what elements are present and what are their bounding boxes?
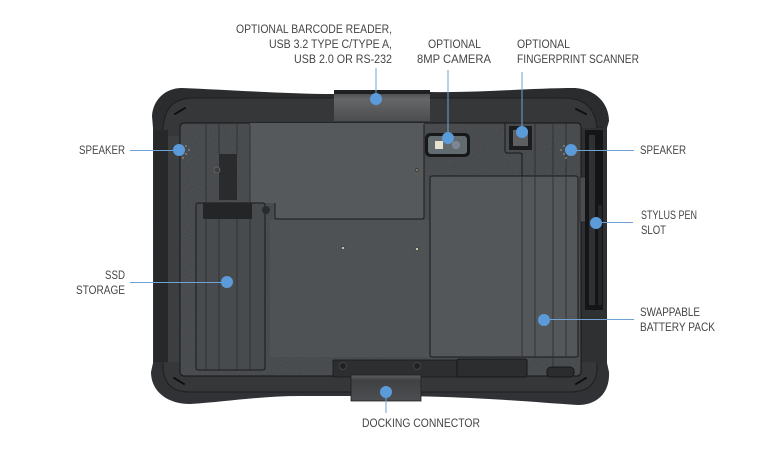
plate studs (341, 246, 345, 250)
label: left speaker: SPEAKER (79, 145, 125, 157)
label: camera (417, 39, 491, 66)
side strip left (154, 130, 168, 362)
fingerprint scanner (509, 126, 532, 150)
centre plate (270, 220, 430, 357)
panel texture (181, 124, 580, 375)
battery pack (430, 123, 578, 376)
corner vents (174, 108, 586, 384)
label: stylus pen slot (641, 210, 697, 237)
label: barcode reader: USB 3.2 TYPE C/TYPE A, (269, 39, 392, 51)
battery latch (457, 359, 527, 377)
plate outline (275, 124, 424, 219)
top-left plate (250, 123, 424, 219)
SSD slot (219, 154, 237, 200)
label: camera: OPTIONAL (428, 39, 482, 51)
main rear panel (180, 123, 581, 376)
label: SSD storage: SSD (105, 270, 125, 282)
fingerprint bay (505, 123, 522, 176)
docking connector (351, 375, 421, 401)
label: swappable battery (640, 307, 715, 334)
label: swappable battery: BATTERY PACK (640, 322, 715, 334)
label: camera: 8MP CAMERA (417, 54, 491, 66)
label: stylus pen slot: STYLUS PEN (641, 210, 697, 222)
label: fingerprint scanner: OPTIONAL (517, 39, 571, 51)
bottom connector band (333, 360, 458, 377)
inner frame (163, 98, 603, 392)
SSD door (196, 124, 265, 370)
tablet body (151, 88, 609, 405)
SSD latch (203, 203, 252, 219)
label: stylus pen slot: SLOT (641, 225, 666, 237)
rubber bumper outline (151, 88, 609, 405)
label: fingerprint scanner (517, 39, 639, 66)
camera module (425, 133, 470, 157)
band screws (340, 362, 420, 370)
label: SSD storage (76, 270, 125, 297)
label: barcode reader: OPTIONAL BARCODE READER, (236, 24, 392, 36)
pen slot (585, 130, 603, 310)
battery tab (580, 177, 586, 222)
label: swappable battery: SWAPPABLE (640, 307, 700, 319)
callout lines (130, 68, 634, 413)
speaker grilles (182, 145, 567, 159)
right side strip (581, 128, 606, 362)
label: right speaker: SPEAKER (640, 145, 686, 157)
top module (334, 90, 430, 121)
hinge screw (262, 206, 270, 214)
label: SSD storage: STORAGE (76, 285, 125, 297)
label: barcode reader: USB 2.0 OR RS-232 (294, 54, 392, 66)
callout dots (173, 93, 602, 398)
label: barcode reader (236, 24, 392, 66)
screw near slot (214, 167, 220, 173)
label: docking connector: DOCKING CONNECTOR (362, 418, 480, 430)
small button (547, 367, 574, 377)
label: fingerprint scanner: FINGERPRINT SCANNER (517, 54, 639, 66)
